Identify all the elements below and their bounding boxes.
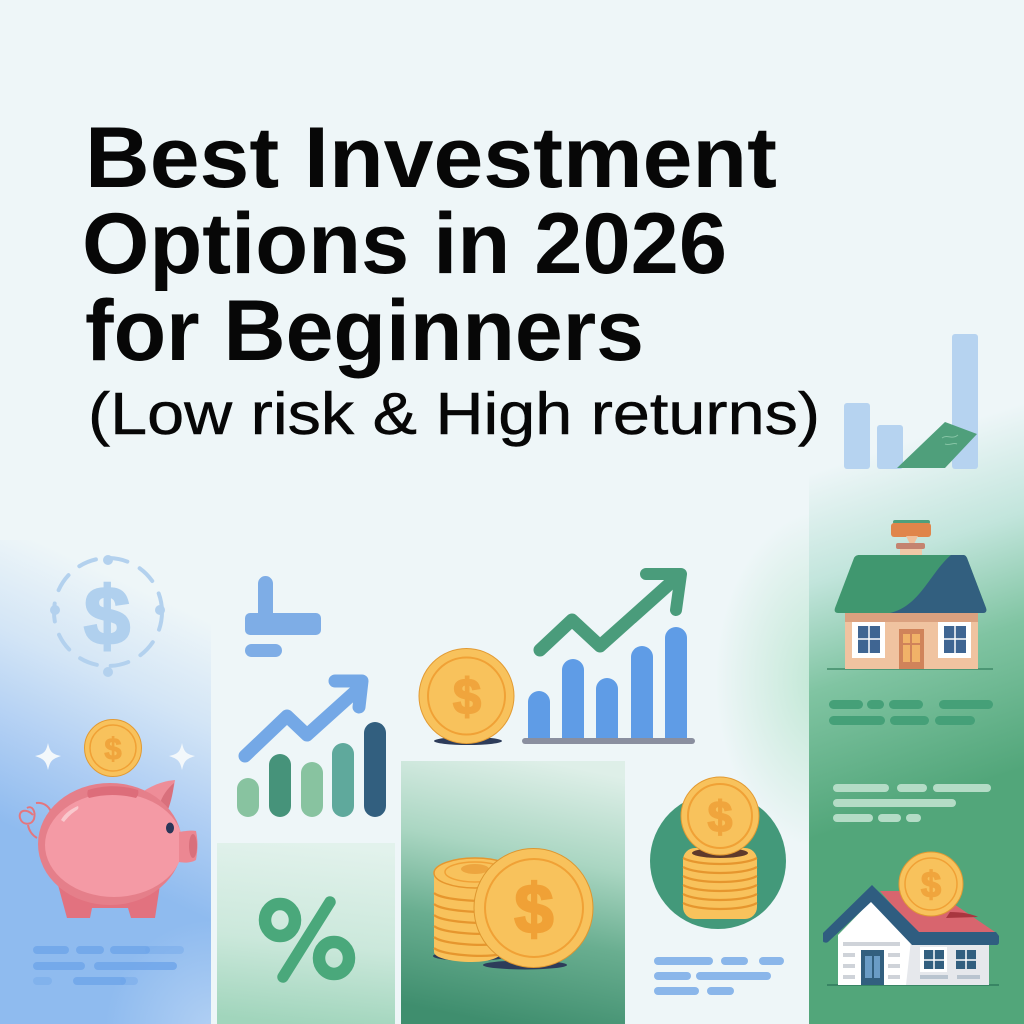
subtitle: (Low risk & High returns) [88, 381, 820, 447]
panel: percent card [217, 843, 395, 1024]
icon: piggy bank [20, 780, 198, 918]
chart: small growth bars and arrow [237, 681, 386, 817]
panel: left blue column [0, 540, 211, 1024]
icon: large coin with shadow [419, 648, 514, 745]
panel: coins card [401, 761, 625, 1024]
icon: white house with coin: $ [921, 864, 941, 905]
icon: coin stack in green circle: $ [708, 793, 732, 842]
title: for Beginners [85, 283, 644, 379]
text placeholder lines: piggy [33, 946, 184, 985]
icon: sparkles [35, 743, 195, 770]
text placeholder lines: coin stack [654, 957, 784, 995]
background glow near right column [715, 510, 935, 850]
text placeholder lines: green house [829, 700, 993, 725]
icon: dollar in dashed circle [50, 555, 165, 677]
icon: coin stack in green circle [650, 777, 786, 929]
text placeholder lines: pale on green [833, 784, 991, 822]
icon: coin stack with large coin [433, 848, 593, 970]
icon: coin above piggy bank: $ [104, 731, 122, 766]
chart: blue bars with green arrow [522, 574, 695, 744]
title [82, 110, 820, 447]
icon: faded bar chart with banknote [844, 334, 978, 469]
icon: blue minus-plus symbol [245, 576, 321, 657]
icon: coin above piggy bank [84, 720, 142, 776]
icon: dollar in dashed circle: $ [84, 571, 130, 662]
title: Best Investment [85, 110, 777, 206]
icon: coin stack with large coin: $ [515, 870, 553, 948]
icon: house with green roof [827, 520, 993, 669]
title: Options in 2026 [82, 196, 727, 292]
panel: right green column [809, 380, 1024, 1024]
icon: large coin with shadow: $ [453, 669, 481, 725]
icon: white house with coin [823, 852, 999, 985]
icon: percent sign [265, 902, 349, 977]
